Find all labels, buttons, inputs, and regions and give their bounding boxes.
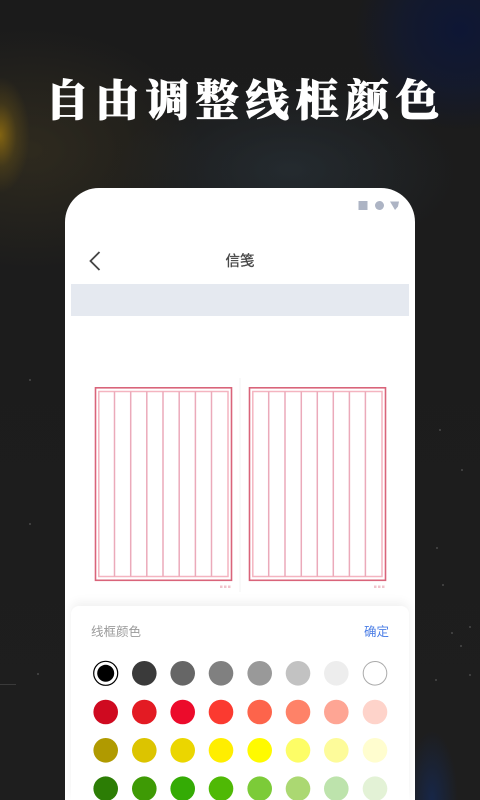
letter paper pages: [94, 378, 386, 592]
banner strip: [71, 284, 409, 316]
page marks: [220, 586, 384, 588]
status bar icons: [358, 201, 399, 210]
row: reds: [93, 700, 387, 724]
nav title: 信笺: [226, 254, 254, 270]
row: greens: [93, 776, 387, 800]
left page: [96, 388, 232, 580]
right page: [250, 388, 386, 580]
colour swatch grid: [93, 660, 388, 800]
panel: colour picker sheet: [71, 606, 409, 800]
row: yellows: [93, 738, 387, 763]
page divider: [239, 378, 241, 592]
icon: back arrow: [89, 251, 100, 271]
row: greys: [94, 661, 387, 686]
phone mockup: [65, 188, 415, 800]
sheet heading: 线框颜色: [91, 625, 141, 639]
confirm button: 确定: [364, 625, 389, 639]
title: 自由调整线框颜色: [46, 78, 446, 126]
